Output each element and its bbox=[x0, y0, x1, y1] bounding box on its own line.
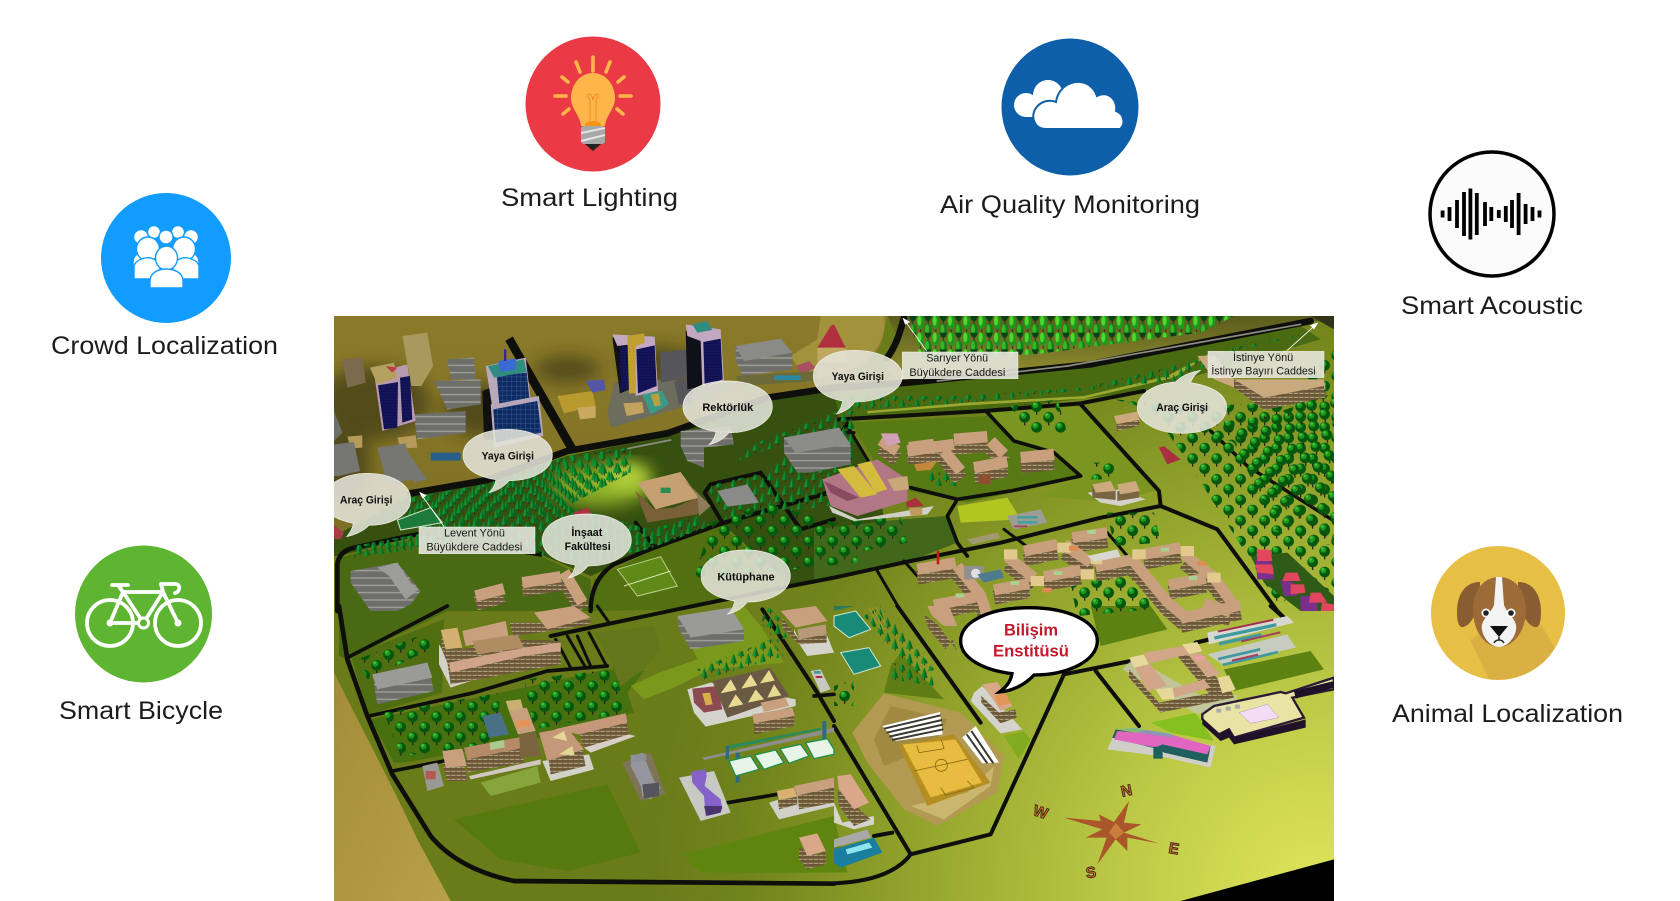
brick building wings bbox=[476, 433, 1054, 609]
bubble: kutuphane bbox=[701, 550, 790, 614]
forests bbox=[354, 316, 1334, 756]
arrow: istinye direction bbox=[1287, 323, 1317, 350]
label: smart bicycle: Smart Bicycle bbox=[59, 697, 223, 725]
icon: animal localization dog bbox=[1431, 546, 1565, 680]
label: smart lighting: Smart Lighting bbox=[501, 184, 678, 212]
bubble: yaya girisi north bbox=[813, 350, 902, 414]
road network bbox=[337, 318, 1334, 884]
bubble: yaya girisi west bbox=[463, 429, 552, 493]
map ground bbox=[317, 316, 1334, 901]
compass rose: W bbox=[1031, 802, 1050, 823]
bubble: arac girisi east: Araç Girişi bbox=[1156, 402, 1208, 414]
icon: crowd localization bbox=[101, 193, 231, 323]
icon: air quality cloud bbox=[1002, 38, 1138, 176]
lower left buildings bbox=[372, 606, 834, 869]
bubble: insaat fakultesi bbox=[542, 514, 631, 578]
red houses bbox=[1251, 549, 1334, 611]
bubble: kutuphane: Kütüphane bbox=[717, 571, 775, 583]
bubble: arac girisi west: Araç Girişi bbox=[340, 494, 392, 506]
bubble: bilisim enstitusu bbox=[961, 608, 1097, 692]
small parking lots bbox=[967, 509, 1294, 646]
label: smart acoustic: Smart Acoustic bbox=[1401, 292, 1583, 320]
bubble: bilisim enstitusu: Bilişim bbox=[1004, 620, 1058, 639]
icon: smart bicycle bbox=[75, 546, 212, 682]
arrow: sariyer direction bbox=[903, 319, 927, 351]
compass rose bbox=[1031, 782, 1180, 882]
compass rose: S bbox=[1085, 864, 1097, 882]
lower right buildings and stadium bbox=[834, 606, 1334, 868]
bubble: insaat fakultesi: İnşaat bbox=[571, 526, 603, 539]
bubble: insaat fakultesi: Fakültesi bbox=[565, 541, 611, 553]
shed complex bbox=[822, 355, 1326, 544]
caption: levent buyukdere: Büyükdere Caddesi bbox=[426, 541, 522, 553]
bubble: arac girisi west bbox=[324, 473, 411, 537]
arrow: levent direction bbox=[420, 493, 444, 527]
bubble: rektorluk bbox=[683, 381, 772, 445]
caption: sariyer buyukdere: Büyükdere Caddesi bbox=[909, 367, 1005, 379]
label: crowd localization: Crowd Localization bbox=[51, 332, 278, 360]
bubble: yaya girisi north: Yaya Girişi bbox=[832, 371, 884, 383]
campus map panel bbox=[317, 316, 1334, 901]
icon: smart acoustic waveform bbox=[1430, 152, 1554, 276]
bubble: yaya girisi west: Yaya Girişi bbox=[482, 450, 534, 462]
stadium bbox=[882, 712, 999, 806]
bubble: rektorluk: Rektörlük bbox=[702, 402, 754, 414]
bubble: bilisim enstitusu: Enstitüsü bbox=[993, 642, 1069, 661]
compass rose: E bbox=[1167, 840, 1180, 858]
caption: levent buyukdere: Levent Yönü bbox=[444, 528, 505, 540]
caption: istinye bayiri: İstinye Bayırı Caddesi bbox=[1211, 365, 1316, 378]
caption: sariyer buyukdere bbox=[902, 352, 1018, 379]
campus buildings upper bbox=[334, 426, 851, 611]
label: air quality monitoring: Air Quality Monitoring bbox=[940, 191, 1200, 219]
bubble: arac girisi east bbox=[1137, 370, 1227, 433]
caption: istinye bayiri: İstinye Yönü bbox=[1233, 351, 1293, 364]
urban towers and blocks bbox=[334, 321, 847, 484]
compass rose: N bbox=[1119, 782, 1134, 801]
caption: sariyer buyukdere: Sarıyer Yönü bbox=[926, 353, 988, 365]
caption: levent buyukdere bbox=[419, 527, 535, 554]
icon: smart lighting bbox=[526, 36, 660, 172]
brick ring blocks bbox=[917, 530, 1241, 626]
label: animal localization: Animal Localization bbox=[1392, 700, 1623, 728]
caption: istinye bayiri bbox=[1208, 351, 1324, 378]
